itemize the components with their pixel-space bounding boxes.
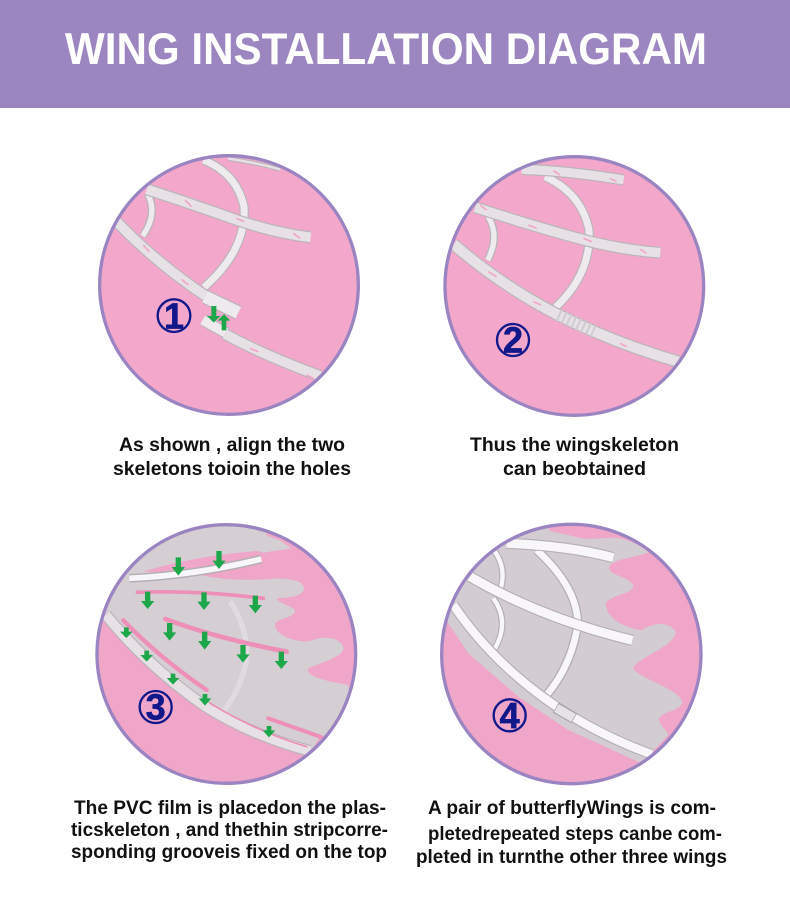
wing skeleton tubes, step 1: [117, 159, 320, 379]
step number 2: 2: [503, 320, 523, 361]
wing skeleton tubes, step 2: [453, 169, 678, 362]
icon: green arrow up: [218, 314, 230, 330]
step number 1: 1: [164, 295, 184, 336]
faint skeleton under film: [223, 602, 247, 712]
PVC film, step 3: [105, 526, 349, 750]
caption: step 3: The PVC film is placedon the plas-: [74, 798, 386, 819]
caption: step 2: Thus the wingskeleton: [470, 435, 679, 456]
panel: step 3 circle: [90, 515, 356, 783]
step number 1: [158, 295, 190, 336]
caption: step 2: can beobtained: [503, 459, 646, 480]
caption: step 4: A pair of butterflyWings is com-: [428, 798, 716, 819]
circle border: [445, 157, 704, 415]
panel: step 1 circle: [100, 156, 358, 414]
caption: step 3: sponding grooveis fixed on the top: [71, 842, 387, 863]
circle border: [442, 524, 701, 784]
step number 4: [494, 695, 526, 736]
step number 4: 4: [500, 695, 520, 736]
panel: step 4 circle: [435, 515, 701, 784]
caption: step 1: skeletons toioin the holes: [113, 459, 351, 480]
top pink gap, step 3: [143, 551, 272, 580]
header banner: [0, 0, 790, 108]
PVC film, step 4: [448, 528, 682, 762]
panel: step 2 circle: [445, 157, 704, 415]
caption: step 4: pletedrepeated steps canbe com-: [428, 824, 722, 845]
caption: step 4: pleted in turnthe other three wings: [416, 847, 727, 868]
title: WING INSTALLATION DIAGRAM: [65, 25, 707, 74]
icon: green arrow down: [207, 306, 220, 323]
main lower tube: [106, 615, 310, 751]
step number 2: [497, 320, 529, 361]
top white bar: [129, 559, 261, 578]
step number 3: [140, 687, 172, 728]
pink strips: [123, 592, 320, 747]
green arrows: [120, 551, 288, 737]
caption: step 3: ticskeleton , and thethin stripcorre-: [71, 820, 388, 841]
caption: step 4: [416, 798, 727, 868]
step number 3: 3: [146, 687, 166, 728]
caption: step 1: As shown , align the two: [119, 435, 345, 456]
caption: step 1: [113, 435, 351, 480]
circle border: [97, 525, 356, 783]
circle border: [100, 156, 358, 414]
caption: step 2: [470, 435, 679, 480]
caption: step 3: [71, 798, 388, 863]
wing skeleton tubes, step 4: [453, 543, 652, 754]
